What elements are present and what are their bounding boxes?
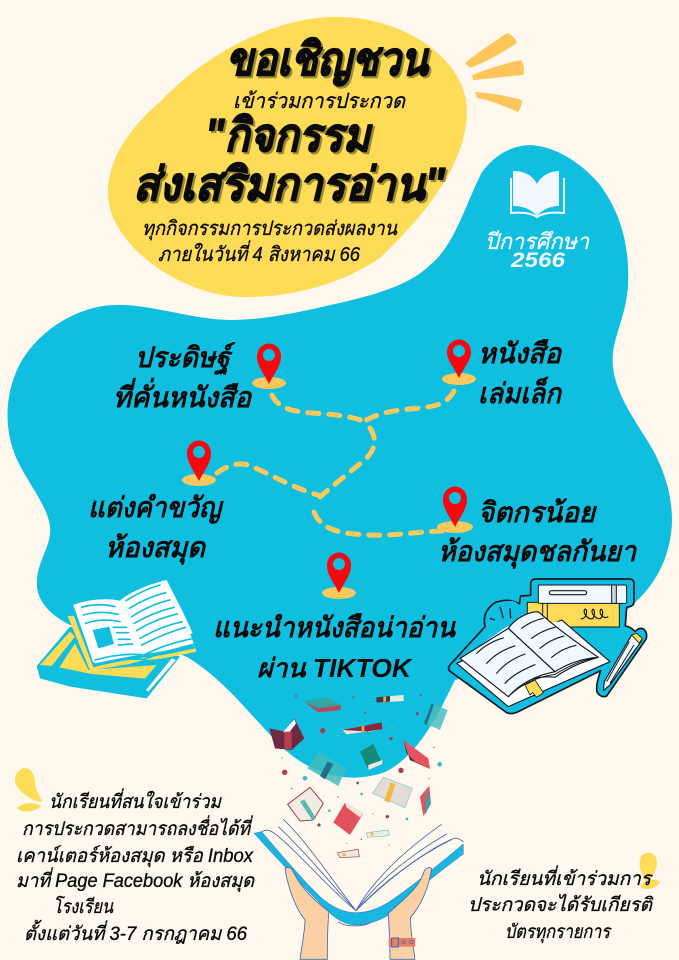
text block: how to sign up: เคาน์เตอร์ห้องสมุด หรือ Inbox xyxy=(16,845,254,867)
label: tiktok recommendation xyxy=(213,612,457,683)
flying books xyxy=(269,695,448,858)
label: library blessing xyxy=(88,492,224,565)
text block: how to sign up: ตั้งแต่วันที่ 3-7 กรกฎาคม 66 xyxy=(24,919,247,945)
title: activity name: ส่งเสริมการอ่าน" xyxy=(133,158,446,210)
text block: certificate note: บัตรทุกรายการ xyxy=(505,922,612,943)
title: invitation heading: ขอเชิญชวน xyxy=(226,33,430,87)
label: bookmark craft: ประดิษฐ์ xyxy=(135,341,237,376)
text block: how to sign up: นักเรียนที่สนใจเข้าร่วม xyxy=(49,788,222,813)
label: tiktok recommendation: แนะนำหนังสือน่าอ่าน xyxy=(213,612,457,643)
icon: right yellow quote mark xyxy=(640,853,660,889)
text block: how to sign up: โรงเรียน xyxy=(53,895,114,918)
marker: young artist xyxy=(437,486,473,533)
text block: academic year: 2566 xyxy=(510,249,565,272)
text block: academic year: ปีการศึกษา xyxy=(485,229,590,254)
icon: left yellow quote mark xyxy=(15,768,42,812)
marker: tiktok recommendation xyxy=(322,552,356,599)
text block: certificate note: นักเรียนที่เข้าร่วมการ xyxy=(477,865,654,890)
illustration: flying books from open book held in hands xyxy=(254,694,463,959)
label: library blessing: แต่งคำขวัญ xyxy=(88,492,224,524)
illustration: left open book on blue book xyxy=(37,580,197,698)
title: activity name: "กิจกรรม xyxy=(207,111,375,163)
text block: academic year xyxy=(485,229,590,272)
title: activity name: "กิจกรรม xyxy=(205,109,373,161)
label: young artist xyxy=(438,497,637,569)
title: invitation heading: ขอเชิญชวน xyxy=(228,35,432,89)
sticker outline xyxy=(448,579,647,714)
text block: certificate note xyxy=(468,865,654,943)
label: bookmark craft: ที่คั่นหนังสือ xyxy=(113,377,253,413)
label: young artist: ห้องสมุดชลกันยา xyxy=(438,536,637,569)
dashed route xyxy=(217,391,454,535)
label: young artist: จิตกรน้อย xyxy=(478,497,598,528)
label: small book: หนังสือ xyxy=(478,338,563,369)
label: small book xyxy=(478,338,563,409)
text block: how to sign up: การประกวดสามารถลงชื่อได้ที่ xyxy=(22,815,254,840)
label: bookmark craft xyxy=(113,341,253,413)
text block: submission deadline: ทุกกิจกรรมการประกวดส่งผลงาน xyxy=(142,218,398,241)
marker: bookmark craft xyxy=(252,344,286,389)
marker: library blessing xyxy=(182,440,216,486)
title: activity name xyxy=(133,109,448,212)
icon: open book xyxy=(511,171,564,217)
text block: certificate note: ประกวดจะได้รับเกียรติ xyxy=(468,893,654,916)
text block: how to sign up: มาที่ Page Facebook ห้องสมุด xyxy=(16,867,256,892)
illustration: right sticker books and pencil xyxy=(448,579,647,714)
blue blob background xyxy=(8,145,672,778)
subtitle: join the contest: เข้าร่วมการประกวด xyxy=(233,90,406,113)
flying dots xyxy=(282,694,435,840)
hands xyxy=(285,867,432,959)
text block: how to sign up xyxy=(16,788,256,945)
text block: submission deadline: ภายในวันที่ 4 สิงหาคม 66 xyxy=(158,240,361,266)
yellow title blob xyxy=(108,17,467,297)
marker: small book xyxy=(442,340,476,385)
title: activity name: ส่งเสริมการอ่าน" xyxy=(135,160,448,212)
label: library blessing: ห้องสมุด xyxy=(105,532,207,565)
watch band xyxy=(389,938,415,947)
label: tiktok recommendation: ผ่าน TIKTOK xyxy=(257,653,413,683)
open book xyxy=(262,819,463,926)
text block: submission deadline xyxy=(142,218,398,266)
icon: sunburst rays xyxy=(465,33,524,112)
label: small book: เล่มเล็ก xyxy=(478,376,563,409)
